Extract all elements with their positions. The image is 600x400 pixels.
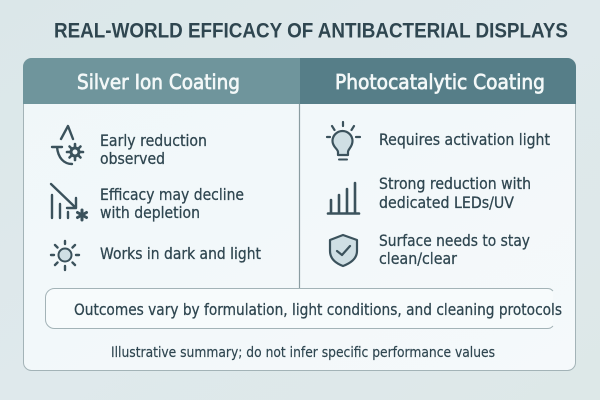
panel header: photocatalytic coating [300, 58, 576, 104]
item: requires activation light [327, 122, 550, 160]
panel header: silver ion coating: Silver Ion Coating [77, 70, 240, 94]
panel: comparison card [23, 58, 576, 370]
text: works in dark and light: Works in dark and light [100, 244, 261, 263]
text: strong reduction with dedicated LEDs/UV: Strong reduction with [379, 174, 531, 193]
item: works in dark and light [51, 241, 261, 270]
text: early reduction observed: Early reduction [100, 131, 207, 150]
item: surface clean [330, 231, 530, 268]
icon: shield with check [330, 235, 357, 266]
item: strong reduction [328, 174, 531, 214]
callout: outcomes vary [46, 288, 562, 328]
icon: light bulb [327, 122, 360, 160]
icon: sun [51, 241, 79, 270]
icon: declining bars with arrow [51, 184, 86, 220]
footnote: Illustrative summary; do not infer specific performance values [111, 345, 495, 361]
text: efficacy may decline with depletion: Efficacy may decline [100, 185, 244, 204]
text: efficacy may decline with depletion: with depletion [100, 203, 200, 222]
item: early reduction [52, 126, 207, 168]
panel header: photocatalytic coating: Photocatalytic Coating [335, 70, 545, 94]
text: strong reduction with dedicated LEDs/UV: dedicated LEDs/UV [379, 193, 514, 212]
text: surface needs to stay clean/clear: clean/clear [379, 249, 457, 268]
icon: rising bar chart [328, 183, 359, 214]
text: surface needs to stay clean/clear: Surface needs to stay [379, 231, 530, 250]
panel header: silver ion coating [23, 58, 300, 104]
text: early reduction observed: observed [100, 149, 165, 168]
text: requires activation light: Requires activation light [379, 130, 550, 149]
icon: droplet with microbe [52, 126, 83, 164]
item: efficacy decline [51, 184, 244, 222]
